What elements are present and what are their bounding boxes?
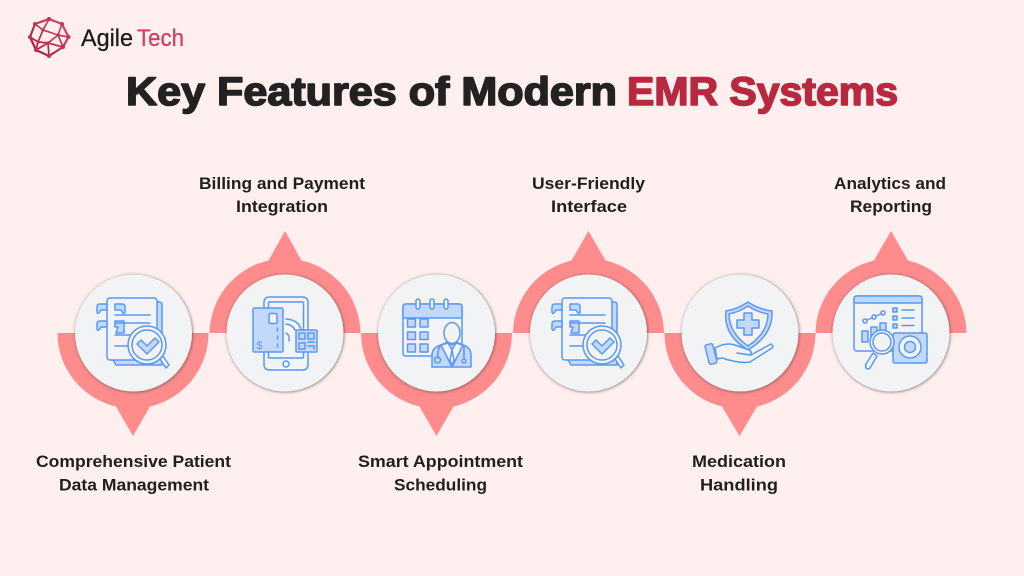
label 1 xyxy=(36,452,231,494)
logo wordmark: Agile xyxy=(81,25,133,52)
label 2: Integration xyxy=(236,197,328,216)
label 6 xyxy=(834,174,946,216)
ring arc with pointer 4 xyxy=(513,231,664,333)
logo: AgileTech xyxy=(28,17,184,58)
ring arc with pointer 5 xyxy=(664,333,816,436)
step 6: Analytics and Reporting xyxy=(816,174,966,392)
icon: phone with card and QR xyxy=(253,297,317,370)
circle 4 xyxy=(530,274,647,392)
step 3: Smart Appointment Scheduling xyxy=(358,274,523,494)
circle 5 xyxy=(682,274,798,392)
label 3 xyxy=(358,452,523,494)
icon: analytics dashboard xyxy=(854,296,927,369)
label 5 xyxy=(692,452,786,494)
icon: patient records with magnifier xyxy=(97,298,169,368)
label 5: Handling xyxy=(700,476,778,494)
icon: document with check magnifier xyxy=(552,298,624,368)
label 6: Reporting xyxy=(850,197,932,216)
icon: phone with card and QR: $ xyxy=(256,340,263,352)
title xyxy=(126,70,898,114)
ring arc with pointer 2 xyxy=(210,231,360,333)
step 1: Comprehensive Patient Data Management xyxy=(36,274,231,494)
label 2: Billing and Payment xyxy=(199,174,365,193)
title: Key Features of Modern xyxy=(126,70,617,114)
circle 3 xyxy=(378,274,495,392)
label 1: Comprehensive Patient xyxy=(36,452,231,471)
label 4: User-Friendly xyxy=(532,174,646,193)
ring arc with pointer 3 xyxy=(361,333,512,436)
step 2: Billing and Payment Integration xyxy=(199,174,365,392)
label 2 xyxy=(199,174,365,216)
logo wordmark: Tech xyxy=(137,25,184,52)
step 4: User-Friendly Interface xyxy=(513,174,664,392)
label 4 xyxy=(532,174,646,216)
ring arc with pointer 1 xyxy=(58,333,208,436)
icon: hand holding medical shield xyxy=(705,302,773,365)
icon: logo mesh xyxy=(28,17,70,58)
step 5: Medication Handling xyxy=(664,274,816,494)
label 3: Scheduling xyxy=(394,476,487,494)
label 6: Analytics and xyxy=(834,174,946,193)
circle 1 xyxy=(75,274,192,392)
label 1: Data Management xyxy=(59,476,209,494)
circle 2 xyxy=(226,274,344,392)
icon: calendar with doctor xyxy=(403,299,471,367)
label 4: Interface xyxy=(551,197,627,216)
label 5: Medication xyxy=(692,452,786,471)
circle 6 xyxy=(832,274,950,392)
title: EMR Systems xyxy=(627,70,898,114)
ring arc with pointer 6 xyxy=(816,231,966,333)
label 3: Smart Appointment xyxy=(358,452,523,471)
